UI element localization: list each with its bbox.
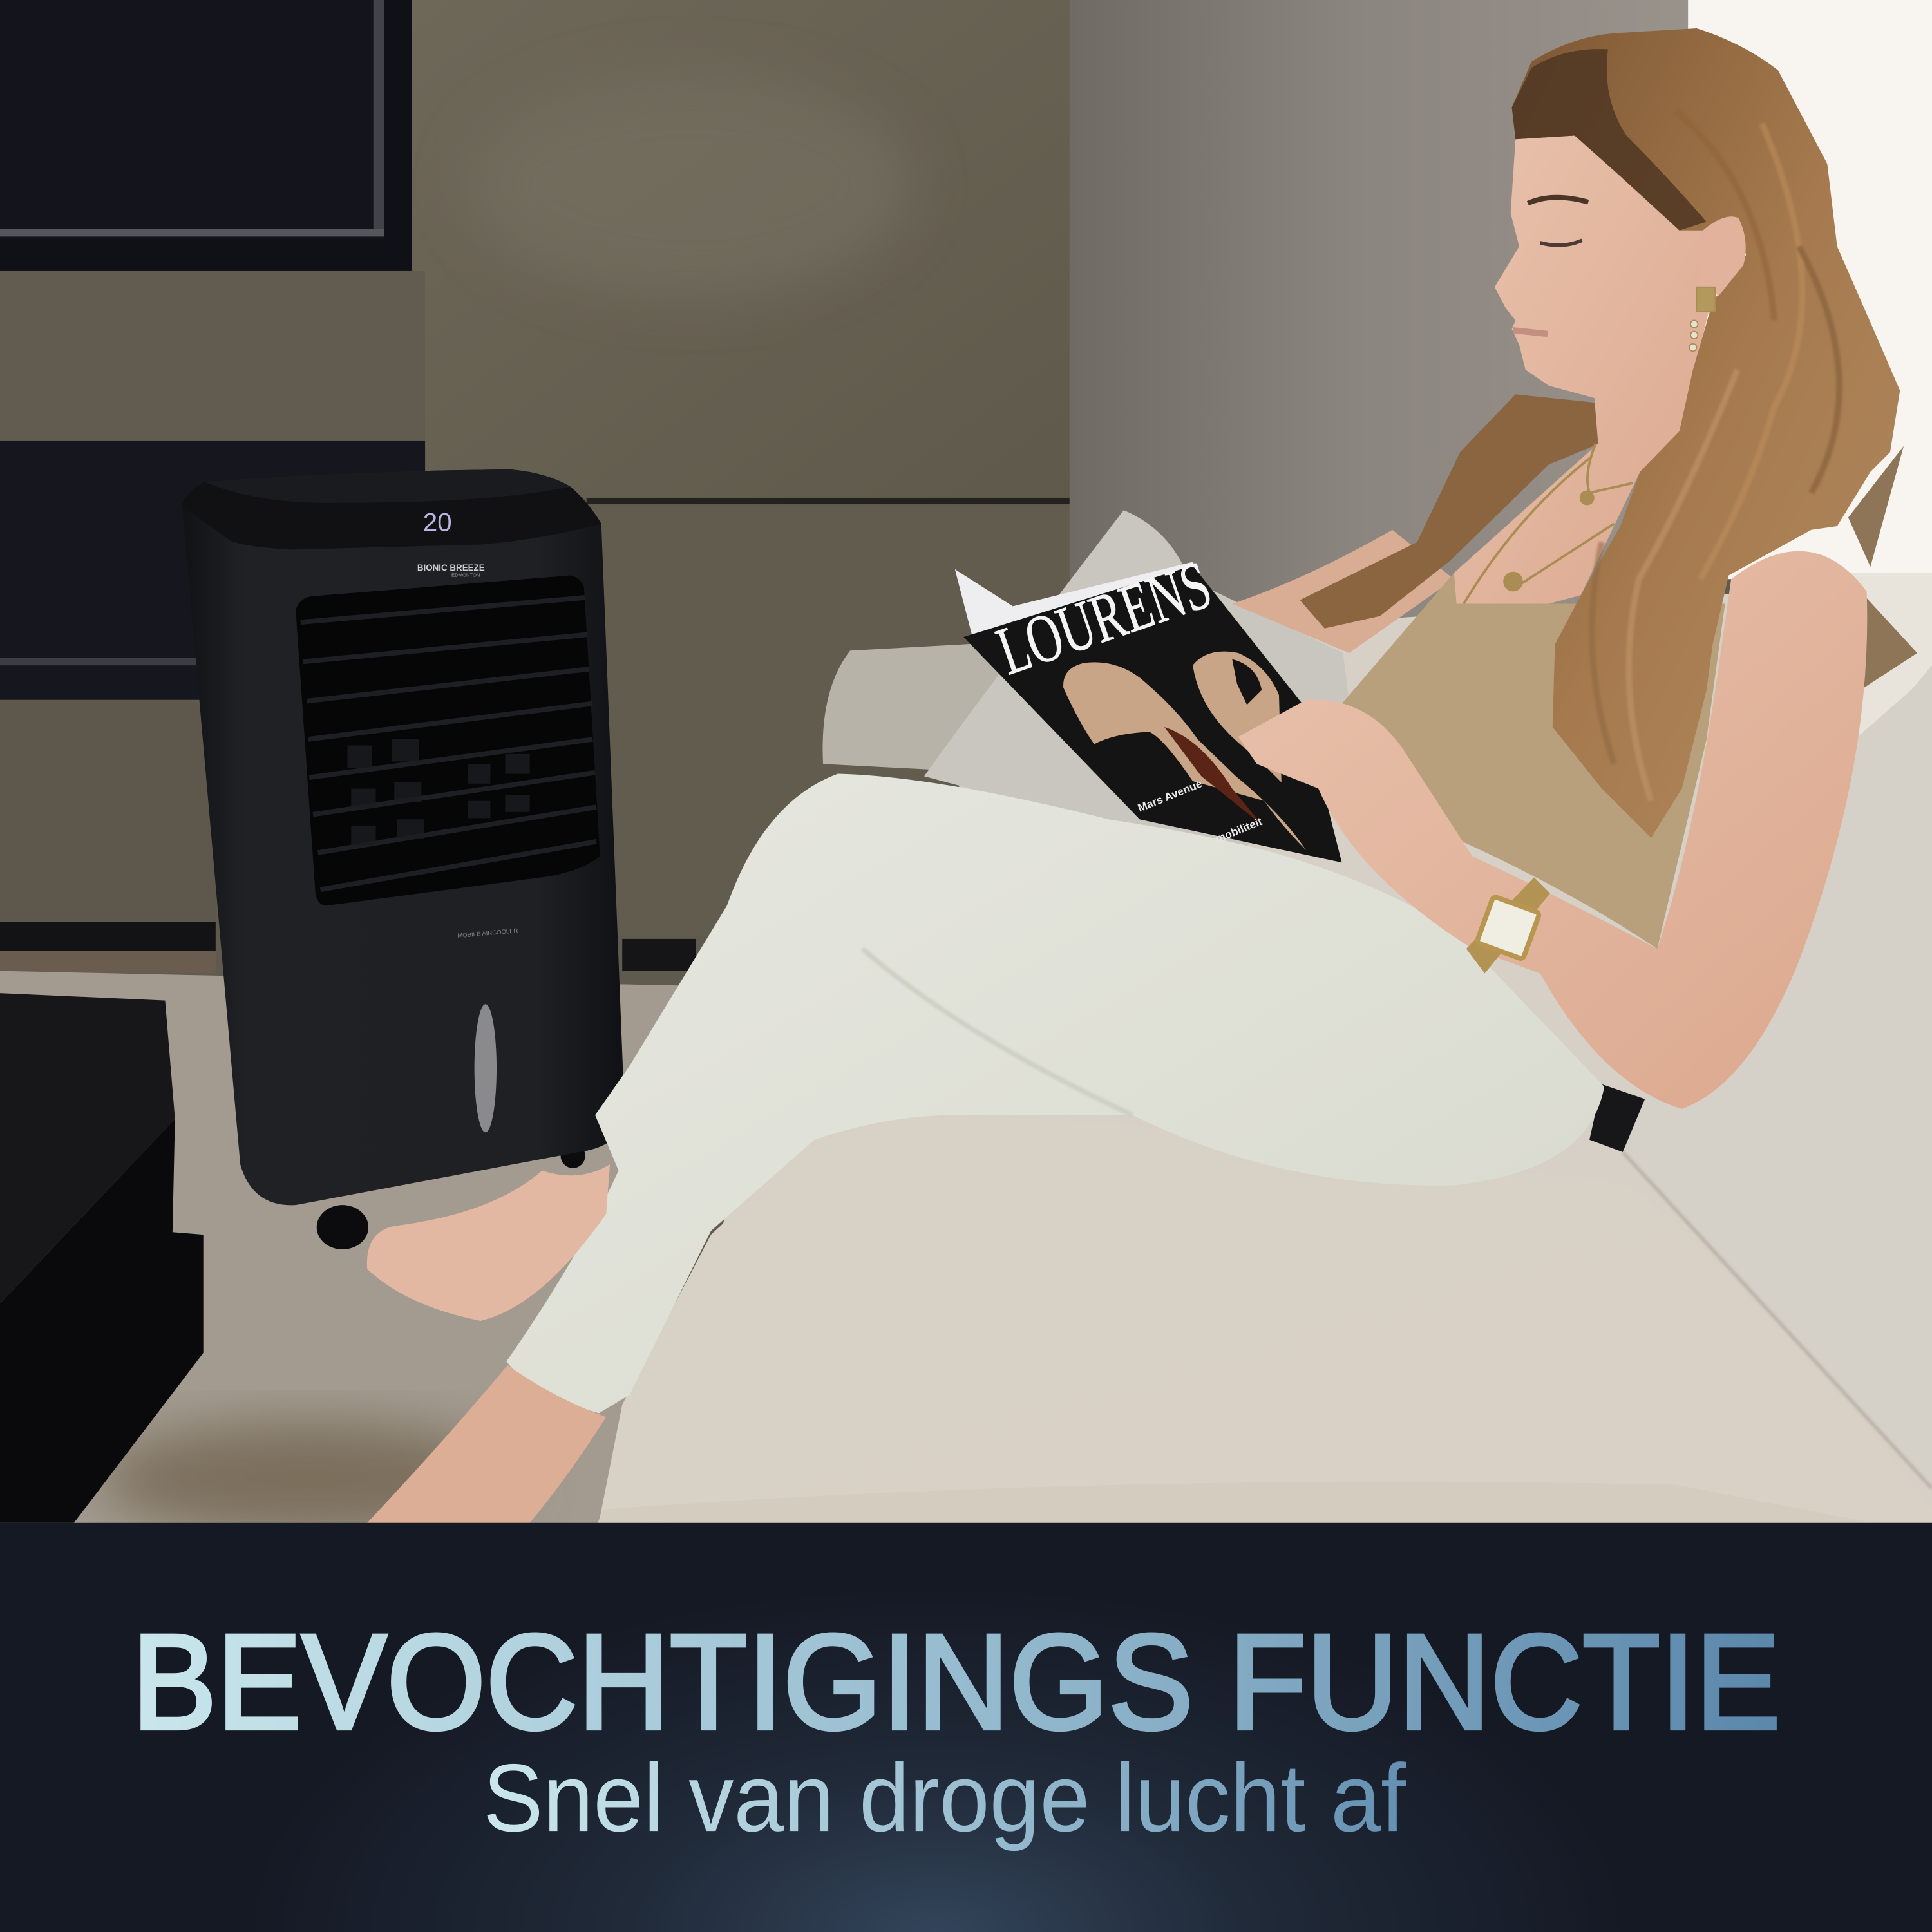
photo: living room background bbox=[0, 0, 1932, 1528]
woman: long wavy hair bbox=[1512, 28, 1900, 838]
hair: dark root area bbox=[1512, 49, 1707, 231]
air cooler product bbox=[181, 469, 625, 1249]
woman: bare feet bbox=[367, 1164, 610, 1523]
woman: gold necklaces bbox=[1464, 444, 1633, 604]
cooler: brand logo: BIONIC BREEZE bbox=[417, 563, 485, 573]
photo: sofa with cushions bbox=[598, 510, 1932, 1523]
sofa: seat cushion bbox=[599, 1115, 1932, 1523]
magazine: cover lines bbox=[1136, 777, 1264, 845]
woman: earring bbox=[1689, 287, 1715, 351]
cooler: brand logo bbox=[417, 563, 485, 578]
sofa: cream pillow right bbox=[1799, 573, 1932, 788]
text banner bbox=[0, 1523, 1932, 1932]
cooler: water level window bbox=[475, 1004, 497, 1132]
sofa: crease between seat and back bbox=[1623, 1152, 1932, 1488]
sofa: textured back bbox=[1623, 665, 1932, 1491]
woman: head and neck bbox=[1454, 129, 1725, 604]
woman: arm and hand holding magazine bbox=[1238, 551, 1867, 1109]
magazine: cover lines: Mars Avenue bbox=[1136, 777, 1204, 815]
sofa: light pillow bbox=[924, 510, 1349, 850]
cooler: display reading: 20 bbox=[423, 508, 452, 537]
brown cushion behind shoulder bbox=[1848, 446, 1917, 690]
cooler: wheels bbox=[317, 1144, 585, 1249]
magazine: title: LOURENS bbox=[988, 547, 1220, 690]
banner: background bbox=[0, 1523, 1932, 1932]
magazine: cover art bbox=[1063, 652, 1306, 850]
sofa: base filling bbox=[641, 579, 1932, 1523]
sofa: left side cushion bbox=[822, 643, 1059, 776]
woman: eye bbox=[1540, 240, 1582, 245]
photo: black coffee table bbox=[0, 993, 204, 1523]
photo: carpet bbox=[0, 971, 690, 1528]
woman: white trousers bbox=[506, 774, 1604, 1414]
woman: brow bbox=[1528, 198, 1588, 204]
sofa: dark gap behind hip bbox=[1589, 1084, 1645, 1152]
banner: heading: BEVOCHTIGINGS FUNCTIE bbox=[132, 1605, 1781, 1757]
magazine: cover lines: mobiliteit bbox=[1213, 815, 1264, 845]
cooler: brand logo: EDMONTON bbox=[451, 572, 480, 578]
woman: gold wristwatch bbox=[1466, 877, 1550, 973]
woman: ear bbox=[1698, 216, 1746, 296]
woman: far arm bbox=[1232, 530, 1454, 653]
hair: strands bbox=[1592, 111, 1839, 801]
woman: lips bbox=[1513, 330, 1548, 334]
cooler: louvre grille bbox=[296, 575, 600, 905]
cooler: top control panel bbox=[181, 469, 601, 549]
banner: subheading: Snel van droge lucht af bbox=[483, 1744, 1406, 1852]
magazine: white pages bbox=[955, 562, 1198, 641]
cooler: main body bbox=[182, 507, 625, 1205]
cooler: model caption: MOBILE AIRCOOLER bbox=[457, 927, 518, 940]
magazine: black cover bbox=[963, 565, 1342, 862]
woman: beige tank top bbox=[1343, 573, 1725, 949]
woman: left hair lock bbox=[1300, 394, 1599, 629]
magazine bbox=[955, 547, 1342, 862]
